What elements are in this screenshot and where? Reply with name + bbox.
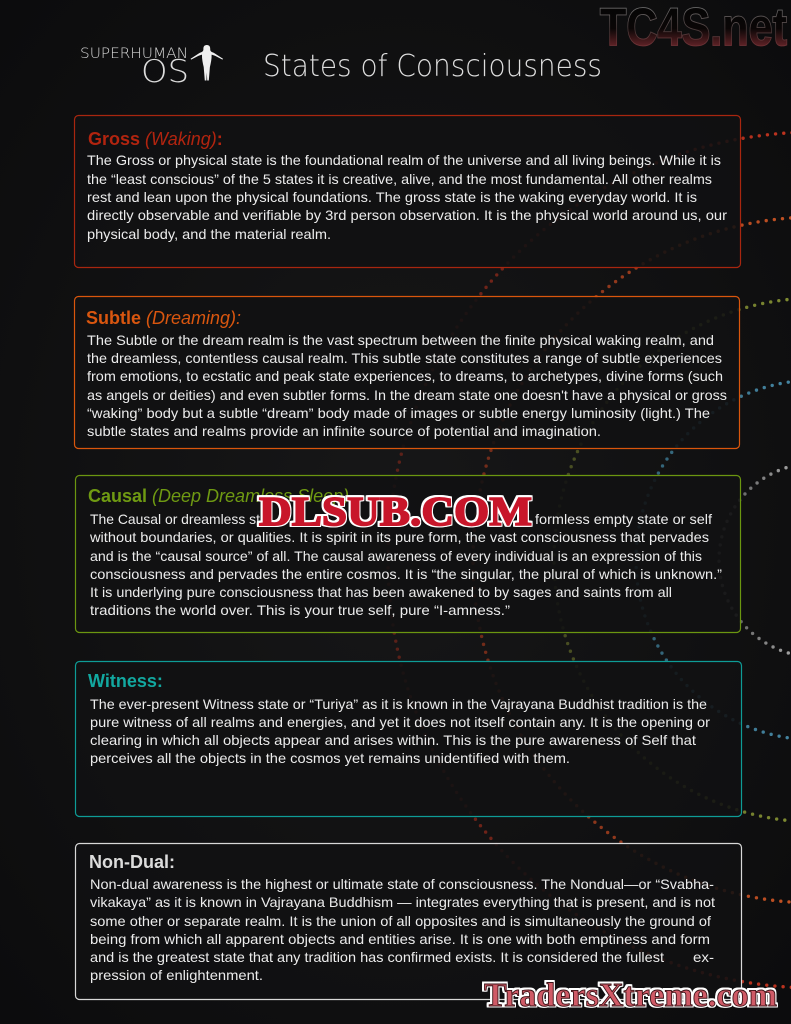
text: causal description: formless empty state or self	[535, 512, 712, 527]
heading: witness: Witness:	[88, 671, 163, 691]
text: non-dual description	[90, 877, 715, 983]
text: gross description: directly observable and verifiable by 3rd person observation. It is the physical world around us, our	[87, 208, 728, 223]
text: causal description: and is the “causal source” of all. The causal awareness of every individual is an expression of this	[90, 549, 702, 564]
text: gross description: rest and lean upon the physical foundations. The gross state is the waking everyday world. It is	[87, 190, 697, 205]
logo: Superhuman OS: SUPERHUMAN	[80, 46, 188, 62]
text: causal description: without boundaries, or qualities. It is spirit in its pure form, the vast consciousness that pervades	[89, 530, 709, 545]
text: causal description: It is underlying pure consciousness that has been awakened to by sages and saints from all	[90, 585, 672, 600]
watermark: TradersXtreme.com: TradersXtreme.com	[484, 977, 777, 1014]
heading: subtle: Subtle (Dreaming):	[86, 308, 241, 328]
icon: human figure with outstretched arms	[191, 45, 223, 80]
watermark: DLSUB.COM: DLSUB.COM	[259, 488, 532, 534]
panel: non-dual	[76, 844, 742, 1000]
text: causal description	[89, 512, 722, 618]
panel: witness	[76, 662, 742, 816]
text: gross description	[87, 153, 728, 242]
text: causal description: consciousness and pervades the entire cosmos. It is “the singular, the plural of which is unknown.”	[90, 567, 722, 582]
text: non-dual description: Non-dual awareness is the highest or ultimate state of consciousness. The Nondual—or “Svabha-	[90, 877, 714, 892]
text: subtle description: subtle states and realms provide an infinite source of potential and imagination.	[87, 424, 601, 439]
text: causal description: The Causal or dreamless st	[90, 512, 260, 527]
text: non-dual description: and is the greatest state that any tradition has confirmed exists. It is considered the fullest	[90, 950, 664, 965]
text: subtle description: “waking” body but a subtle “dream” body made of images or subtle energy luminosity (light.) The	[87, 406, 710, 421]
text: gross description: physical body, and the material realm.	[87, 227, 331, 242]
heading: gross: Gross (Waking):	[88, 129, 223, 149]
title: States of Consciousness	[263, 49, 602, 84]
panel: subtle	[74, 296, 740, 448]
text: witness description: perceives all the objects in the cosmos yet remains unidentified with them.	[90, 751, 570, 766]
panel: gross	[74, 116, 740, 268]
heading: causal: Causal (Deep Dreamless Sleep)	[88, 486, 349, 506]
text: witness description	[90, 697, 710, 766]
text: subtle description: as angels or deities) and even subtler forms. In the dream state one doesn't have a physical or gross	[87, 388, 727, 403]
text: witness description: clearing in which all objects appear and arises within. This is the pure awareness of Self that	[90, 733, 696, 748]
text: non-dual description: vikakaya” as it is known in Vajrayana Buddhism — integrates everything that is present, and is not	[90, 895, 715, 910]
heading: non-dual: Non-Dual:	[89, 852, 175, 872]
text: non-dual description: some other or separate realm. It is the union of all opposites and is simultaneously the ground of	[90, 914, 711, 929]
text: subtle description: from emotions, to ecstatic and peak state experiences, to dreams, to archetypes, divine forms (such	[87, 369, 723, 384]
text: gross description: The Gross or physical state is the foundational realm of the universe and all living beings. While it is	[87, 153, 721, 168]
logo: Superhuman OS	[80, 45, 223, 90]
text: subtle description	[87, 333, 727, 439]
text: non-dual description: pression of enlightenment.	[90, 968, 263, 983]
text: witness description: The ever-present Witness state or “Turiya” as it is known in the Vajrayana Buddhist tradition is the	[90, 697, 707, 712]
text: causal description: traditions the world over. This is your true self, pure “I-amness.”	[90, 603, 511, 618]
decorative concentric dotted arcs	[388, 132, 791, 988]
logo: Superhuman OS: OS	[141, 54, 189, 90]
text: non-dual description: being from which all apparent objects and entities arise. It is one with both emptiness and form	[90, 932, 710, 947]
text: non-dual description: ex-	[693, 950, 714, 965]
text: subtle description: the dreamless, contentless causal realm. This subtle state constitutes a range of subtle experiences	[87, 351, 722, 366]
text: witness description: pure witness of all realms and energies, and yet it does not itself contain any. It is the opening or	[90, 715, 710, 730]
text: gross description: the “least conscious” of the 5 states it is creative, alive, and the most fundamental. All other realms	[87, 172, 712, 187]
text: subtle description: The Subtle or the dream realm is the vast spectrum between the finite physical waking realm, and	[87, 333, 714, 348]
panel: causal	[76, 476, 740, 632]
